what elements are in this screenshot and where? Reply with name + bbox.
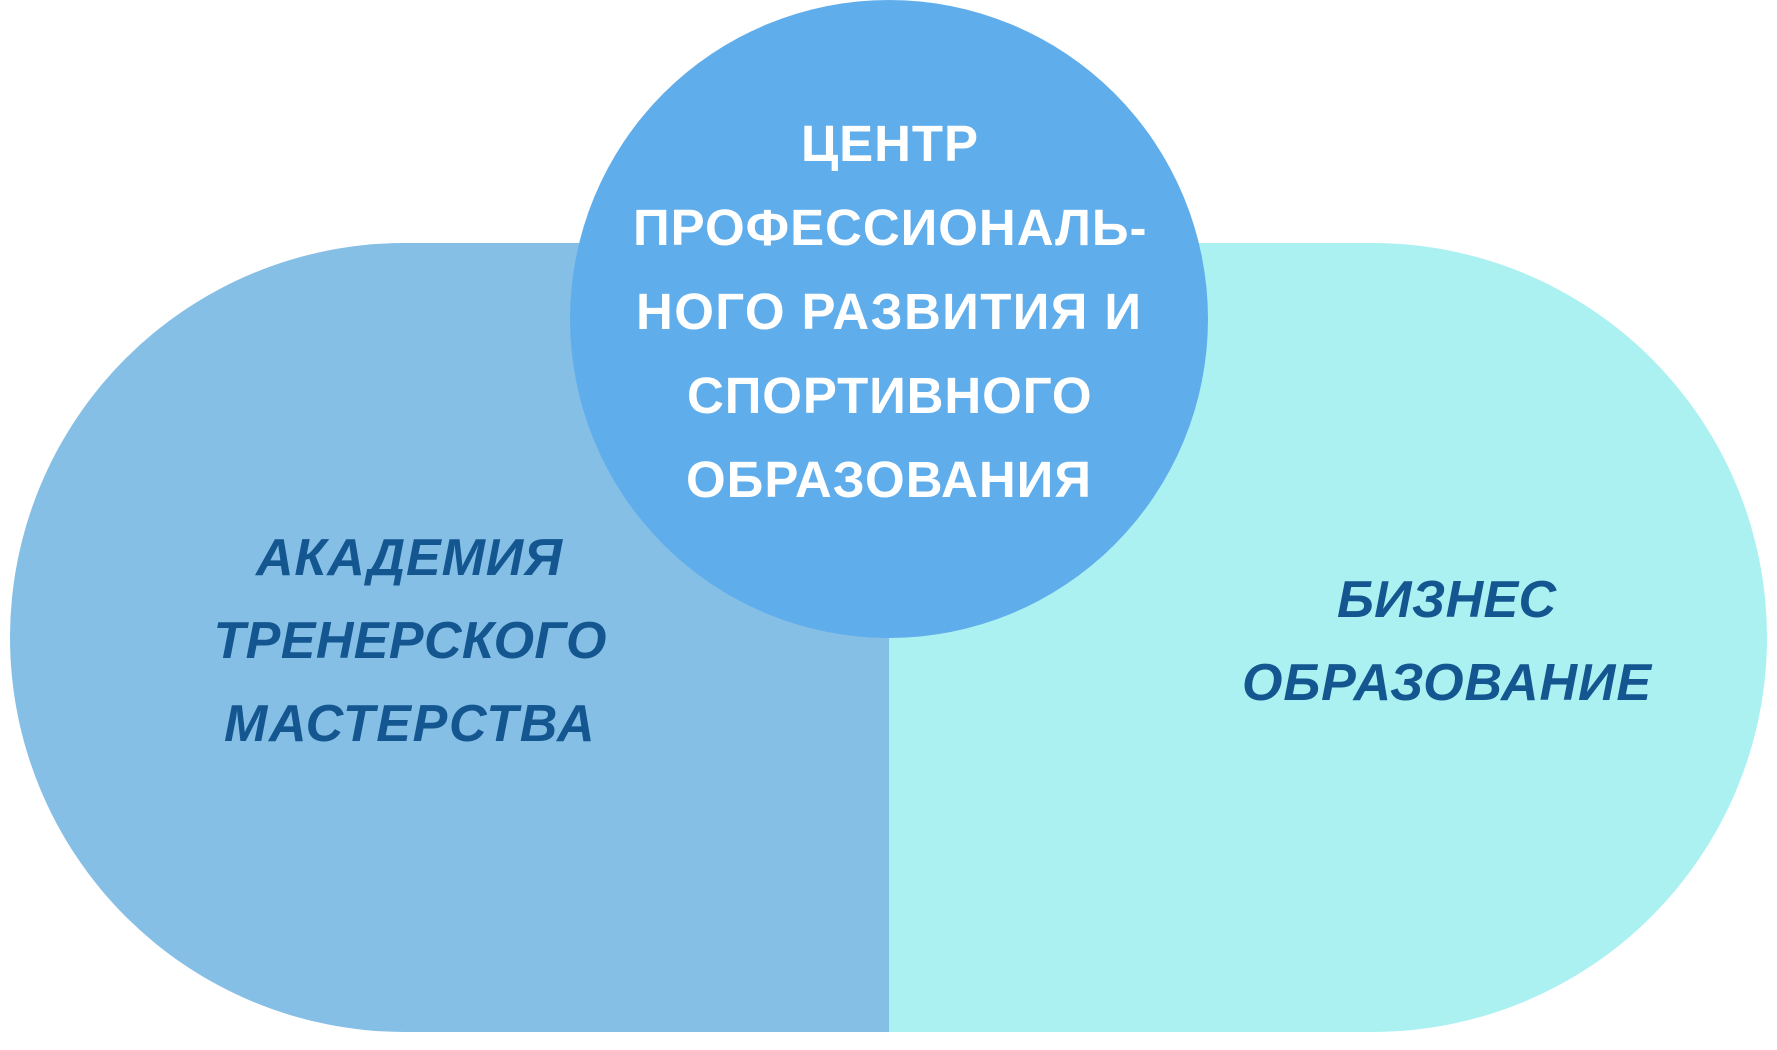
heading: central circle text: ПРОФЕССИОНАЛЬ-: [633, 199, 1146, 256]
heading: central circle text: ОБРАЗОВАНИЯ: [686, 451, 1091, 508]
panel: left half pill: [10, 243, 889, 1032]
text: right panel label: БИЗНЕС: [1337, 571, 1557, 629]
heading: central circle text: [633, 115, 1146, 508]
text: left panel label: АКАДЕМИЯ: [254, 529, 563, 587]
text: right panel label: [1242, 571, 1652, 712]
text: left panel label: [214, 529, 606, 753]
heading: central circle text: СПОРТИВНОГО: [687, 367, 1092, 424]
panel: right half pill: [889, 243, 1767, 1032]
text: left panel label: МАСТЕРСТВА: [224, 695, 594, 753]
text: right panel label: ОБРАЗОВАНИЕ: [1242, 654, 1652, 712]
text: left panel label: ТРЕНЕРСКОГО: [214, 612, 606, 670]
heading: central circle text: ЦЕНТР: [801, 115, 978, 172]
panel: central circle: [570, 0, 1208, 638]
heading: central circle text: НОГО РАЗВИТИЯ И: [636, 283, 1141, 340]
